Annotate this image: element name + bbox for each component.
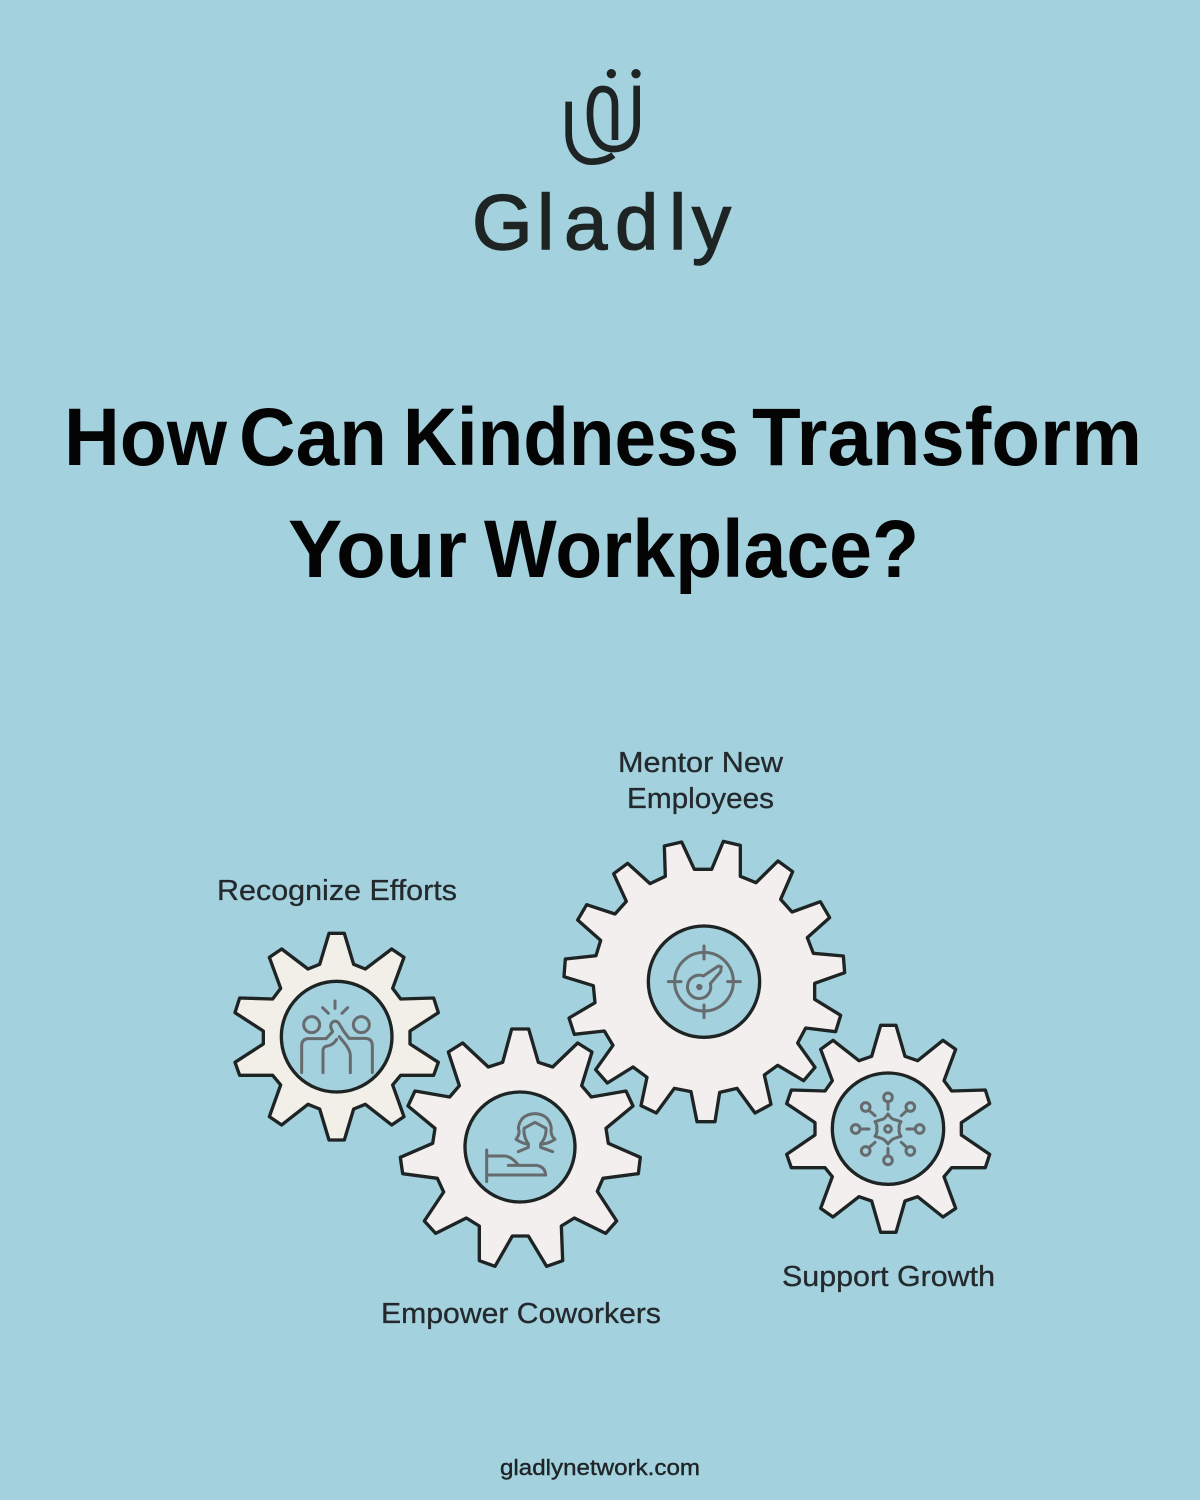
title: Transform <box>752 392 1142 483</box>
gear: Mentor New Employees <box>564 841 845 1122</box>
gear body <box>235 933 438 1140</box>
gear hub <box>281 981 392 1092</box>
icon: high five <box>302 1001 372 1073</box>
title: Your <box>288 504 467 595</box>
label: Mentor New Employees <box>618 747 784 815</box>
label: Empower Coworkers: Empower Coworkers <box>381 1298 661 1330</box>
gear: Recognize Efforts <box>235 933 438 1140</box>
label: Mentor New Employees: Mentor New <box>618 747 784 779</box>
icon: network cog <box>851 1093 924 1165</box>
label: Mentor New Employees: Employees <box>627 783 774 815</box>
icon: Gladly paperclip smile mark <box>569 69 641 162</box>
icon: open hand under person <box>487 1114 555 1182</box>
icon: key in target <box>668 946 740 1018</box>
gear hub <box>465 1092 575 1202</box>
gear body <box>787 1025 990 1232</box>
gear hub <box>648 926 760 1037</box>
label: Recognize Efforts: Recognize Efforts <box>217 875 457 907</box>
gear body <box>564 841 845 1122</box>
title <box>64 392 1142 595</box>
title: Can <box>239 392 387 483</box>
wordmark: Gladly: Gladly <box>472 178 731 266</box>
title: Kindness <box>403 392 739 483</box>
title: How <box>64 392 227 483</box>
gear hub <box>832 1073 944 1184</box>
gear: Empower Coworkers <box>400 1029 640 1266</box>
footer: website: gladlynetwork.com <box>500 1455 700 1480</box>
title: Workplace? <box>484 504 919 595</box>
label: Support Growth: Support Growth <box>782 1261 995 1293</box>
logo: Gladly mark and wordmark <box>472 69 731 266</box>
gear: Support Growth <box>787 1025 990 1232</box>
gear body <box>400 1029 640 1266</box>
